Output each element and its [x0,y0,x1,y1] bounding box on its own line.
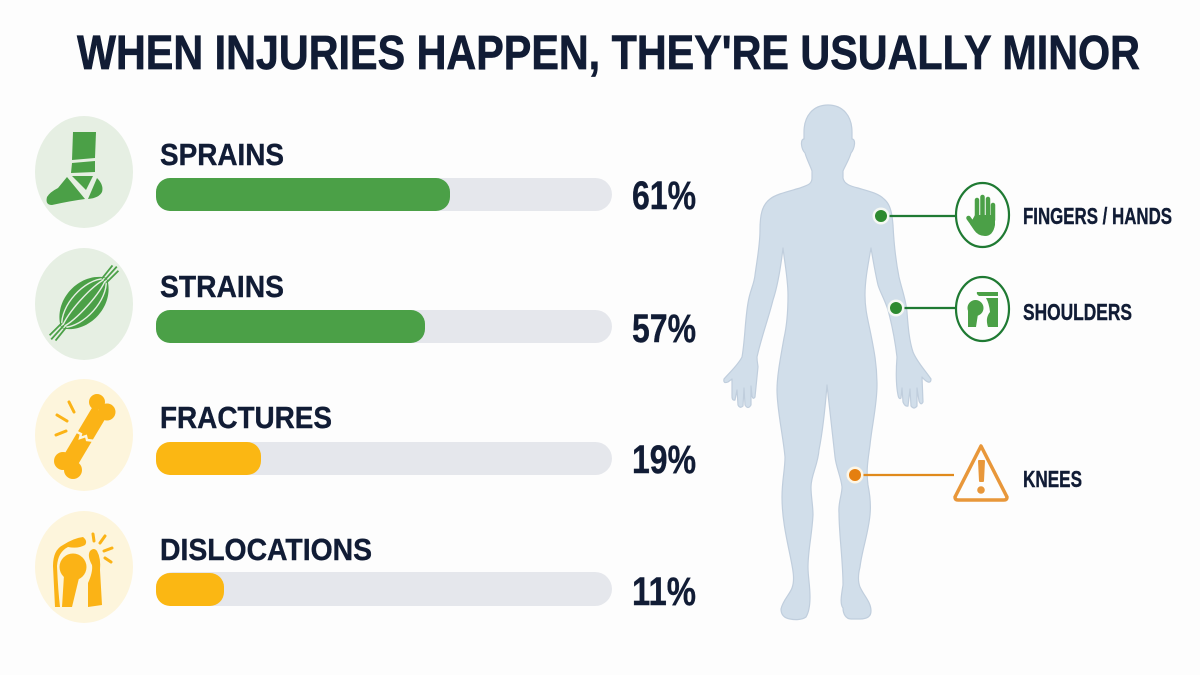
bar: fractures 19% [156,442,612,475]
row: strains [35,248,696,360]
panel: injury types bar chart [35,116,696,623]
body silhouette [724,105,931,620]
label: knees: KNEES [1023,466,1082,492]
value: 57%: 57% [632,307,696,351]
icon: broken bone [35,379,133,491]
row: fractures [35,379,696,491]
label: shoulders: SHOULDERS [1023,299,1132,325]
icon: hand [956,183,1009,247]
marker: knee dot and line to knees [846,466,954,484]
bar: dislocations 11% [156,572,612,606]
icon: dislocated shoulder [35,511,133,623]
value: 19%: 19% [632,438,696,482]
label: dislocations: DISLOCATIONS [160,532,372,567]
label: strains: STRAINS [160,269,284,304]
row: dislocations [35,511,696,623]
row: sprains [35,116,696,228]
value: 61%: 61% [632,174,696,218]
icon: bandaged ankle [35,116,133,228]
bar: strains 57% [156,310,612,343]
panel: body map [724,105,1172,620]
marker: upper arm dot and line to fingers / hands [872,208,956,224]
value: 11%: 11% [632,570,696,614]
icon: warning triangle [955,446,1007,500]
label: sprains: SPRAINS [160,137,284,172]
icon: muscle [35,248,133,360]
marker: forearm dot and line to shoulders [888,300,956,316]
bar: sprains 61% [156,178,612,211]
label: fractures: FRACTURES [160,400,332,435]
icon: shoulder joint [956,277,1009,341]
